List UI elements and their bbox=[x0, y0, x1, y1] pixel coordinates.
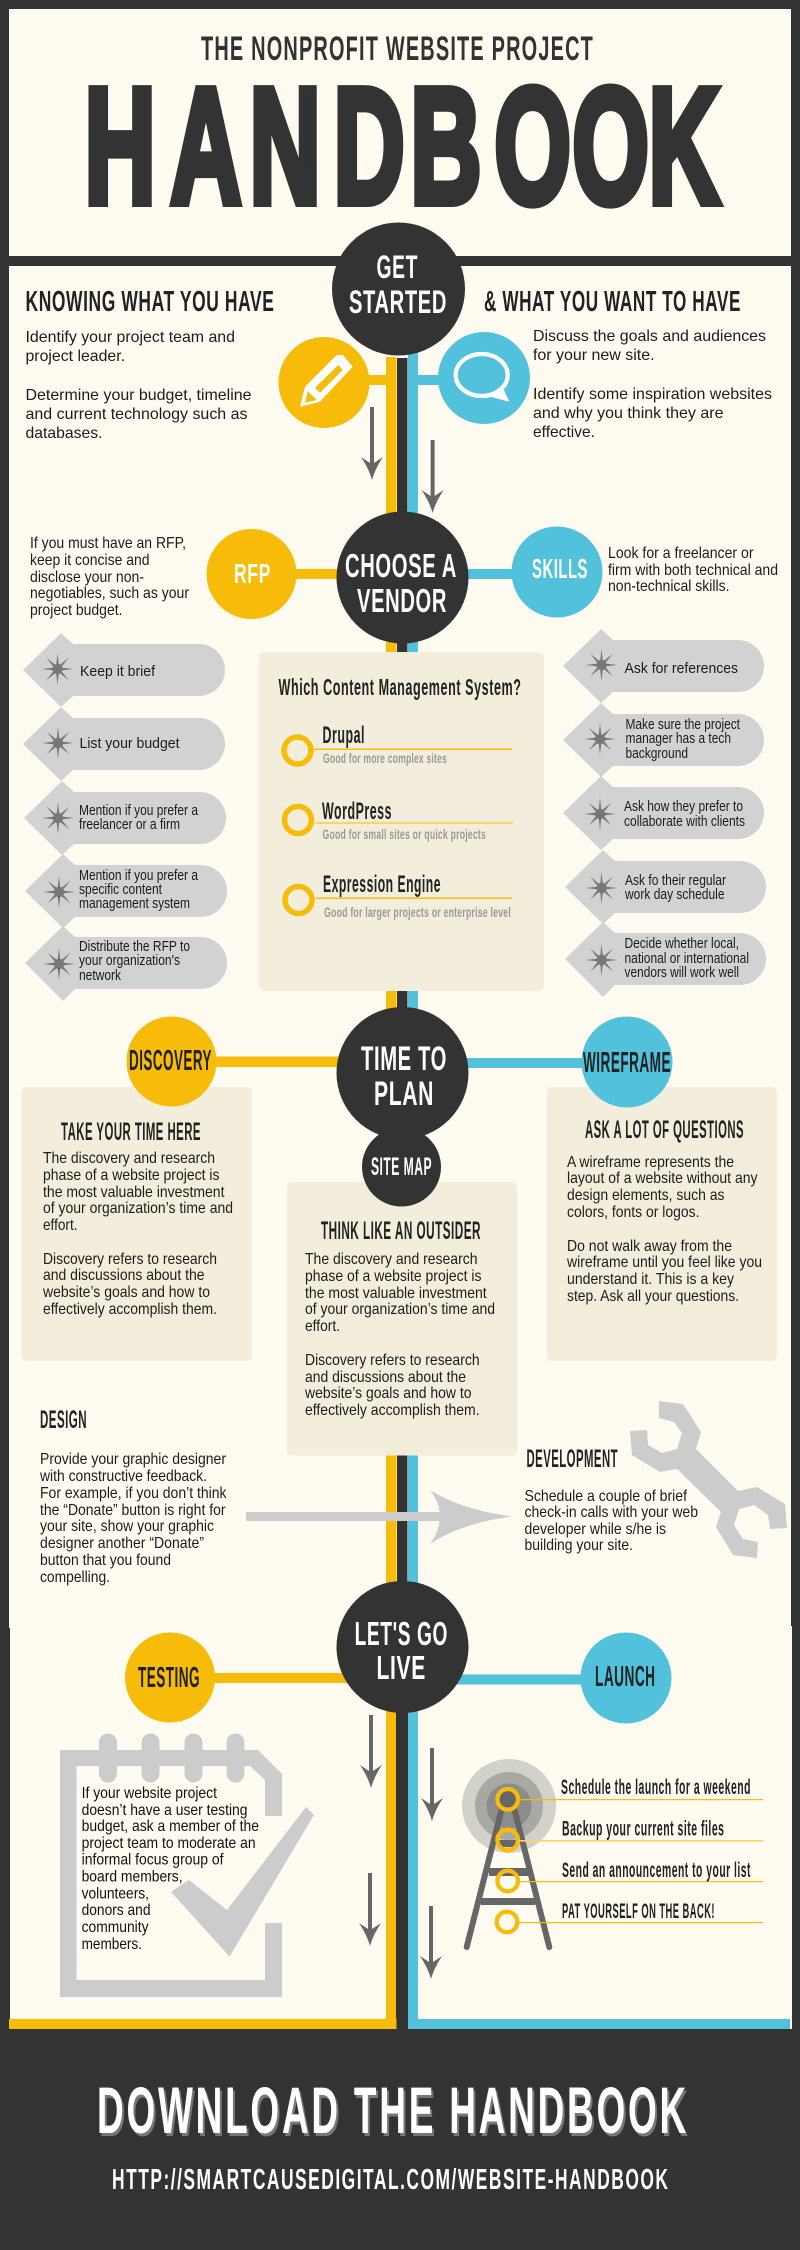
tip: keep it brief bbox=[23, 633, 225, 707]
panel: site map: THINK LIKE AN OUTSIDER bbox=[321, 1217, 481, 1245]
text: wireframe: colors, fonts or logos. bbox=[567, 1204, 700, 1221]
tip: local national international: national or international bbox=[624, 951, 749, 967]
tip: distribute the rfp: network bbox=[79, 968, 122, 984]
text: wireframe: understand it. This is a key bbox=[567, 1271, 734, 1288]
option: wordpress bbox=[284, 798, 513, 842]
circle: choose a vendor bbox=[336, 512, 468, 644]
circle: launch: LAUNCH bbox=[595, 1661, 656, 1693]
circle: rfp bbox=[206, 529, 296, 619]
text: testing: members. bbox=[82, 1936, 142, 1953]
text: design: Provide your graphic designer bbox=[40, 1451, 227, 1468]
panel: design: DESIGN bbox=[40, 1406, 87, 1434]
text: skills: firm with both technical and bbox=[608, 562, 778, 579]
icon: pencil bbox=[278, 337, 370, 428]
panel: discovery: TAKE YOUR TIME HERE bbox=[61, 1118, 201, 1146]
text: discovery: effort. bbox=[43, 1217, 78, 1234]
text: wireframe: wireframe until you feel like you bbox=[566, 1254, 762, 1271]
tip: local national international: vendors will work well bbox=[624, 965, 739, 981]
text: rfp: disclose your non- bbox=[30, 569, 144, 586]
circle: rfp: RFP bbox=[234, 558, 271, 589]
circle: let's go live bbox=[336, 1581, 468, 1713]
text: skills bbox=[608, 545, 778, 595]
text: want: and why you think they are bbox=[533, 405, 724, 422]
text: discovery: phase of a website project is bbox=[43, 1167, 220, 1184]
panel: design bbox=[39, 1406, 512, 1586]
circle: wireframe bbox=[582, 1016, 672, 1108]
tip: ask for references bbox=[563, 629, 764, 703]
text: testing: If your website project bbox=[82, 1785, 217, 1802]
circle: let's go live: LIVE bbox=[376, 1649, 426, 1686]
tip: work day schedule bbox=[565, 850, 766, 924]
option: expression engine bbox=[285, 871, 512, 920]
tip: keep it brief: Keep it brief bbox=[80, 664, 156, 680]
text: wireframe: design elements, such as bbox=[567, 1187, 724, 1204]
panel: get started bbox=[26, 222, 772, 513]
text: want: effective. bbox=[533, 424, 595, 441]
option: expression engine: Expression Engine bbox=[323, 871, 441, 898]
connector: skills bbox=[465, 569, 515, 579]
circle: get started: GET bbox=[376, 249, 418, 285]
list: vendor questions bbox=[563, 629, 766, 997]
option: wordpress: Good for small sites or quick projects bbox=[322, 826, 486, 842]
circle: site map: SITE MAP bbox=[371, 1153, 432, 1181]
text: site map: The discovery and research bbox=[305, 1251, 478, 1268]
frame: blue bottom bar bbox=[408, 2019, 790, 2029]
circle: skills bbox=[512, 526, 602, 618]
tip: tech background: background bbox=[626, 746, 688, 762]
circle: get started bbox=[332, 222, 465, 356]
connector: discovery bbox=[210, 1056, 340, 1067]
circle: time to plan: TIME TO bbox=[361, 1040, 447, 1078]
text: design: button that you found bbox=[40, 1552, 171, 1569]
circle: get started: STARTED bbox=[349, 284, 447, 320]
circle: choose a vendor: VENDOR bbox=[357, 582, 447, 619]
text: development: check-in calls with your web bbox=[524, 1504, 698, 1521]
icon: notepad with check bbox=[60, 1734, 314, 1997]
text: site map: the most valuable investment bbox=[305, 1285, 487, 1302]
text: site map bbox=[304, 1251, 495, 1419]
text: knowing: and current technology such as bbox=[26, 406, 248, 423]
tip: content management system: management system bbox=[79, 896, 190, 912]
arrow: down left bbox=[361, 407, 383, 480]
tip: list your budget: List your budget bbox=[80, 736, 180, 752]
connector: blue bbox=[417, 375, 441, 385]
arrow: down 4 bbox=[420, 1906, 442, 1979]
connector: testing bbox=[210, 1673, 350, 1683]
text: site map: of your organization’s time and bbox=[305, 1301, 495, 1318]
tip: collaborate: collaborate with clients bbox=[624, 814, 745, 830]
connector: yellow bbox=[365, 375, 387, 385]
heading: knowing what you have: KNOWING WHAT YOU HAVE bbox=[26, 286, 274, 318]
text: wireframe: layout of a website without any bbox=[567, 1170, 758, 1187]
text: testing: volunteers, bbox=[82, 1886, 149, 1902]
panel: choose a vendor bbox=[23, 512, 778, 1001]
panel: discovery bbox=[22, 1087, 252, 1361]
option: drupal bbox=[284, 722, 512, 766]
tip: collaborate: Ask how they prefer to bbox=[624, 799, 743, 815]
text: discovery bbox=[42, 1150, 233, 1318]
text: skills: non-technical skills. bbox=[608, 578, 730, 595]
list: rfp tips bbox=[23, 633, 227, 1001]
text: want: Identify some inspiration websites bbox=[533, 386, 772, 403]
text: rfp: If you must have an RFP, bbox=[30, 535, 186, 552]
text: knowing: Determine your budget, timeline bbox=[26, 387, 252, 404]
circle: launch bbox=[580, 1632, 672, 1724]
circle: time to plan bbox=[336, 1007, 468, 1139]
title: HANDBOOK bbox=[85, 55, 720, 238]
circle: time to plan: PLAN bbox=[374, 1075, 434, 1113]
text: design: designer another “Donate” bbox=[40, 1535, 204, 1552]
text: wireframe: Do not walk away from the bbox=[567, 1238, 732, 1255]
circle: skills: SKILLS bbox=[532, 553, 588, 584]
text: knowing: Identify your project team and bbox=[26, 329, 235, 346]
panel: time to plan: DISCOVERY bbox=[129, 1045, 212, 1077]
circle: site map bbox=[362, 1128, 441, 1206]
heading: cms: Which Content Management System? bbox=[278, 674, 522, 700]
text: design: For example, if you don’t think bbox=[40, 1485, 227, 1502]
text: discovery: Discovery refers to research bbox=[43, 1251, 217, 1268]
text: wireframe: step. Ask all your questions. bbox=[567, 1288, 739, 1305]
checklist: launch bbox=[519, 1776, 763, 1923]
panel: development: DEVELOPMENT bbox=[526, 1445, 618, 1473]
text: want bbox=[533, 328, 772, 441]
text: design: your site, show your graphic bbox=[40, 1518, 214, 1535]
tip: distribute the rfp bbox=[25, 926, 227, 1001]
text: skills: Look for a freelancer or bbox=[608, 545, 754, 562]
tip: tech background: manager has a tech bbox=[626, 731, 731, 747]
text: development bbox=[524, 1488, 698, 1554]
connector: launch bbox=[455, 1674, 585, 1684]
text: development: building your site. bbox=[524, 1537, 633, 1554]
circle: let's go live: LET'S GO bbox=[355, 1615, 448, 1652]
text: want: for your new site. bbox=[533, 347, 654, 364]
frame: yellow bottom bar bbox=[9, 2019, 396, 2029]
circle: choose a vendor: CHOOSE A bbox=[345, 547, 457, 584]
text: testing: community bbox=[82, 1919, 148, 1936]
text: discovery: the most valuable investment bbox=[43, 1184, 225, 1201]
icon: broadcast tower bbox=[462, 1759, 556, 1947]
text: testing: doesn’t have a user testing bbox=[82, 1802, 247, 1819]
option: drupal: Good for more complex sites bbox=[323, 750, 447, 766]
tip: content management system bbox=[25, 854, 227, 928]
text: site map: website’s goals and how to bbox=[304, 1385, 472, 1402]
text: site map: Discovery refers to research bbox=[305, 1352, 480, 1369]
tip: local national international bbox=[565, 922, 766, 997]
text: design bbox=[39, 1451, 227, 1586]
text: design: the “Donate” button is right for bbox=[40, 1502, 226, 1519]
text: discovery: The discovery and research bbox=[43, 1150, 215, 1167]
text: discovery: website’s goals and how to bbox=[42, 1284, 210, 1301]
text: discovery: effectively accomplish them. bbox=[43, 1301, 217, 1318]
arrow: down 2 bbox=[359, 1873, 381, 1946]
text: wireframe: A wireframe represents the bbox=[567, 1154, 734, 1171]
text: rfp: negotiables, such as your bbox=[30, 585, 190, 602]
tip: freelancer or firm: Mention if you prefer a bbox=[79, 803, 199, 819]
text: wireframe bbox=[566, 1154, 762, 1305]
arrow: down 1 bbox=[360, 1715, 382, 1788]
panel: let's go live bbox=[9, 1581, 790, 2029]
option: drupal: Drupal bbox=[322, 722, 365, 749]
text: rfp bbox=[30, 535, 190, 619]
text: development: developer while s/he is bbox=[524, 1521, 666, 1538]
tip: ask for references: Ask for references bbox=[624, 661, 738, 677]
arrow: design to development bbox=[246, 1490, 512, 1544]
icon: wrench bbox=[630, 1401, 787, 1558]
tip: content management system: Mention if you prefer a bbox=[79, 868, 199, 884]
text: development: Schedule a couple of brief bbox=[524, 1488, 687, 1505]
text: testing: donors and bbox=[82, 1902, 150, 1919]
text: discovery: and discussions about the bbox=[43, 1267, 205, 1284]
text: rfp: project budget. bbox=[30, 602, 122, 619]
circle: testing: TESTING bbox=[138, 1662, 200, 1694]
panel: which content management system bbox=[259, 652, 544, 991]
text: testing: budget, ask a member of the bbox=[82, 1818, 259, 1835]
circle: testing bbox=[125, 1632, 215, 1722]
text: want: Discuss the goals and audiences bbox=[533, 328, 766, 345]
timeline: central coloured lines bbox=[386, 340, 418, 2030]
text: testing: project team to moderate an bbox=[82, 1835, 256, 1852]
text: knowing: databases. bbox=[26, 425, 102, 442]
tip: tech background bbox=[563, 703, 764, 777]
text: site map: phase of a website project is bbox=[305, 1268, 482, 1285]
panel: development bbox=[524, 1401, 787, 1558]
text: site map: effort. bbox=[305, 1318, 340, 1335]
tip: tech background: Make sure the project bbox=[626, 717, 740, 733]
panel: time to plan: WIREFRAME bbox=[583, 1047, 671, 1079]
text: site map: effectively accomplish them. bbox=[305, 1402, 480, 1419]
arrow: down 3 bbox=[421, 1748, 443, 1821]
panel: time to plan bbox=[22, 1007, 777, 1456]
icon: speech bubble bbox=[438, 332, 530, 424]
text: design: with constructive feedback. bbox=[39, 1468, 207, 1485]
text: testing: informal focus group of bbox=[82, 1852, 224, 1868]
connector: wireframe bbox=[465, 1058, 585, 1068]
tip: local national international: Decide whether local, bbox=[624, 936, 739, 952]
panel: site map bbox=[287, 1182, 517, 1456]
tip: work day schedule: work day schedule bbox=[624, 887, 724, 903]
tip: distribute the rfp: Distribute the RFP to bbox=[79, 939, 190, 955]
text: knowing: project leader. bbox=[26, 348, 125, 365]
text: testing: board members, bbox=[82, 1868, 183, 1886]
text: site map: and discussions about the bbox=[305, 1369, 466, 1386]
option: expression engine: Good for larger projects or enterprise level bbox=[324, 904, 511, 920]
text: design: compelling. bbox=[40, 1569, 110, 1586]
connector: rfp bbox=[290, 569, 340, 579]
text: knowing bbox=[26, 329, 252, 442]
tip: content management system: specific content bbox=[79, 882, 162, 898]
tip: collaborate bbox=[563, 776, 764, 850]
option: wordpress: WordPress bbox=[322, 798, 392, 825]
tip: work day schedule: Ask fo their regular bbox=[625, 873, 726, 889]
tip: distribute the rfp: your organization's bbox=[79, 953, 180, 969]
text: rfp: keep it concise and bbox=[30, 552, 150, 569]
tip: freelancer or firm bbox=[24, 781, 226, 855]
text: discovery: of your organization’s time and bbox=[43, 1200, 233, 1217]
panel: wireframe bbox=[546, 1087, 777, 1361]
text: testing bbox=[82, 1785, 259, 1953]
arrow: down right bbox=[422, 440, 444, 513]
tip: list your budget bbox=[23, 707, 225, 781]
circle: discovery bbox=[126, 1016, 216, 1106]
tip: freelancer or firm: freelancer or a firm bbox=[79, 817, 180, 833]
